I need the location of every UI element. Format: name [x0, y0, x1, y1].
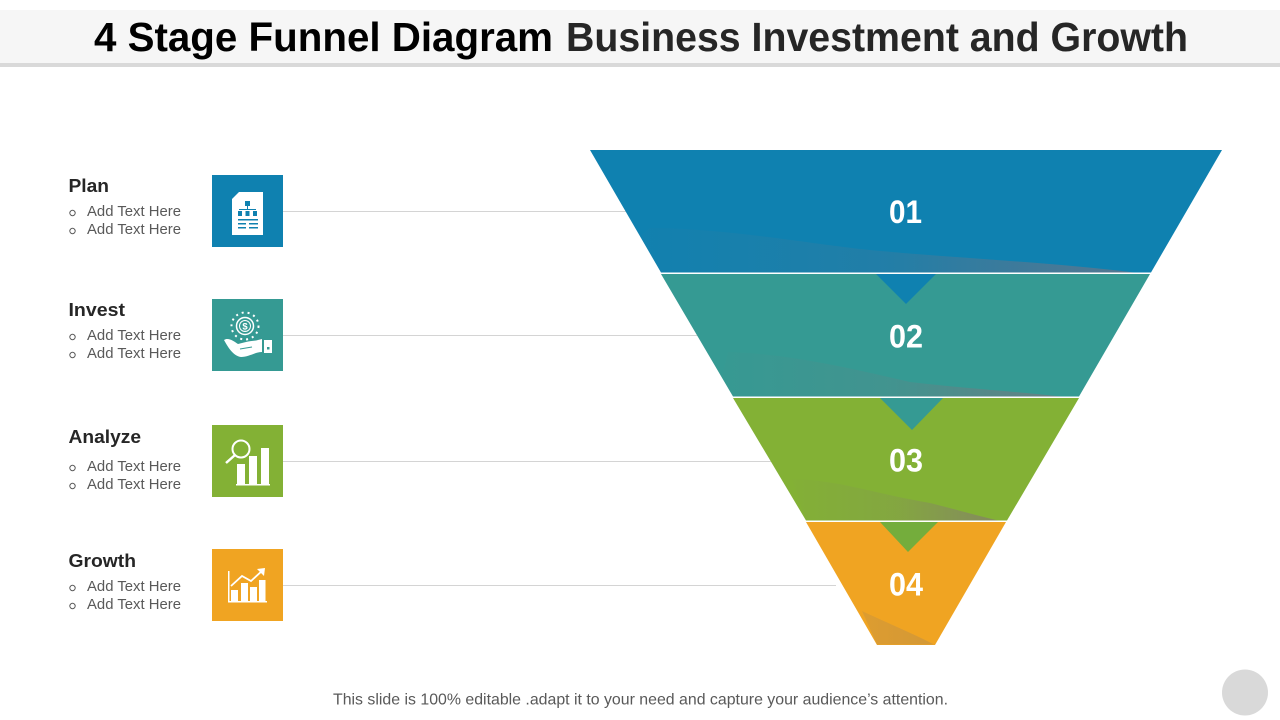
- stage number 04: 04: [889, 566, 923, 602]
- panel: analyze text: Add Text Here: [87, 477, 181, 493]
- divider gaps: [661, 272, 1151, 522]
- heading: plan: Plan: [68, 175, 109, 196]
- funnel band 4: [806, 522, 1006, 645]
- funnel diagram: [590, 150, 1222, 645]
- panel: growth text: Add Text Here: [87, 597, 181, 613]
- title bar: [0, 10, 1280, 67]
- funnel band 2: [661, 274, 1150, 396]
- icon: hand holding coin: [212, 299, 283, 371]
- panel: invest text: [68, 299, 181, 362]
- connector lines: [283, 211, 836, 586]
- stage number 02: 02: [889, 318, 923, 354]
- panel: plan text: Add Text Here: [87, 222, 181, 238]
- panel: analyze text: Add Text Here: [87, 459, 181, 475]
- funnel band 3: [733, 398, 1079, 520]
- panel: analyze text: [68, 426, 181, 493]
- funnel band 1: [590, 150, 1222, 272]
- icon: document with org chart: [212, 175, 283, 247]
- panel: invest text: Add Text Here: [87, 328, 181, 344]
- title: Business Investment and Growth: [566, 14, 1188, 60]
- page badge circle: [1222, 670, 1268, 716]
- panel: plan text: [68, 175, 181, 238]
- arrow 2: [880, 398, 943, 430]
- icon: growth chart: [212, 549, 283, 621]
- heading: invest: Invest: [68, 299, 125, 320]
- panel: growth text: Add Text Here: [87, 579, 181, 595]
- icon: magnifier and bar chart: [212, 425, 283, 497]
- panel: growth text: [68, 550, 181, 613]
- arrow 3: [880, 522, 938, 552]
- arrow 1: [876, 274, 936, 304]
- heading: analyze: Analyze: [68, 426, 141, 447]
- stage number 03: 03: [889, 442, 923, 478]
- panel: invest text: Add Text Here: [87, 346, 181, 362]
- title: 4 Stage Funnel Diagram: [94, 14, 553, 60]
- icon: hand holding coin: $: [242, 322, 248, 332]
- heading: growth: Growth: [68, 550, 136, 571]
- stage number 01: 01: [889, 194, 922, 230]
- panel: plan text: Add Text Here: [87, 204, 181, 220]
- footer note: This slide is 100% editable .adapt it to your need and capture your audience’s attention.: [333, 692, 948, 708]
